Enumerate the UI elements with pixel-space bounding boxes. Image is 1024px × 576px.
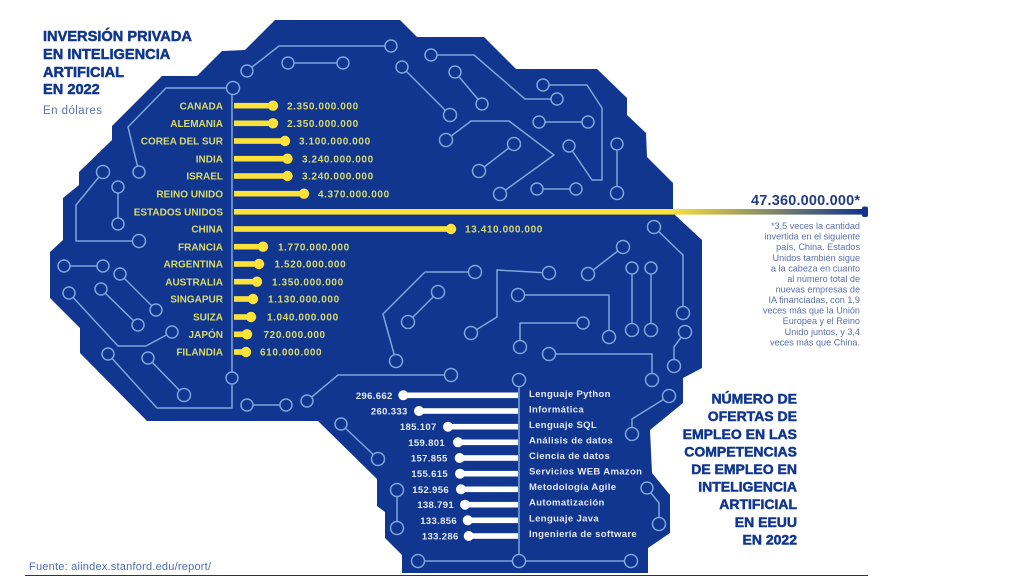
skill: Servicios WEB Amazon: Servicios WEB Amazon xyxy=(529,466,642,478)
country: Israel: ISRAEL xyxy=(186,172,223,183)
skill: Lenguaje SQL: 185.107 xyxy=(400,422,437,433)
country: Francia: FRANCIA xyxy=(178,242,223,253)
footnote on US investment: veces más que China. xyxy=(770,337,860,347)
skill: Automatización: Automatización xyxy=(529,498,605,508)
skill: Metodología Agile: 152.956 xyxy=(412,485,449,496)
skill: Informática xyxy=(371,404,584,418)
title: job postings: EN 2022 xyxy=(743,532,797,548)
country: Reino Unido: REINO UNIDO xyxy=(156,189,223,200)
country: Estados Unidos xyxy=(134,206,868,218)
footnote on US investment: invertida en el siguiente xyxy=(764,231,860,241)
title: job postings: OFERTAS DE xyxy=(708,408,797,424)
country: Estados Unidos: ESTADOS UNIDOS xyxy=(134,207,223,218)
country: Singapur: 1.130.000.000 xyxy=(268,295,340,306)
country: Alemania xyxy=(170,118,359,130)
country: Suiza: SUIZA xyxy=(193,313,223,324)
title: job postings: ARTIFICIAL xyxy=(719,496,797,512)
skill: Lenguaje Python xyxy=(356,389,611,402)
footnote on US investment: país, China. Estados xyxy=(776,242,860,252)
bar chart: job postings by skill xyxy=(356,389,642,542)
country: Alemania: 2.350.000.000 xyxy=(287,119,359,130)
title: job postings: EN EEUU xyxy=(735,514,797,530)
footnote on US investment: a la cabeza en cuanto xyxy=(771,263,860,273)
title: private investment xyxy=(43,27,192,98)
title: job postings: DE EMPLEO EN xyxy=(691,461,797,477)
title: job postings: INTELIGENCIA xyxy=(698,478,797,494)
footnote on US investment: Unidos también sigue xyxy=(773,253,860,263)
country: Japón xyxy=(189,328,326,341)
skill: Análisis de datos: Análisis de datos xyxy=(529,436,613,446)
skill: Lenguaje Java: 133.856 xyxy=(420,516,457,527)
circuit traces xyxy=(64,46,685,561)
circuit nodes xyxy=(58,40,692,568)
footnote on US investment: nuevas empresas de xyxy=(776,284,860,294)
country: Japón: JAPÓN xyxy=(189,328,223,341)
country: Israel xyxy=(186,171,374,183)
title: job postings xyxy=(683,390,797,548)
country: Australia: 1.350.000.000 xyxy=(272,277,344,288)
skill: Lenguaje SQL xyxy=(400,420,597,433)
country: Australia xyxy=(165,276,344,288)
skill: Ingeniería de software: Ingeniería de software xyxy=(529,529,637,540)
skill: Lenguaje Java: Lenguaje Java xyxy=(529,514,599,524)
skill: Lenguaje Python: Lenguaje Python xyxy=(529,389,611,400)
title: private investment: EN 2022 xyxy=(43,82,100,98)
skill: Informática: Informática xyxy=(529,404,584,416)
country: India xyxy=(196,154,374,165)
skill: Lenguaje SQL: Lenguaje SQL xyxy=(529,420,597,431)
country: Canada: CANADA xyxy=(180,101,223,112)
country: India: 3.240.000.000 xyxy=(302,154,374,165)
skill: Análisis de datos: 159.801 xyxy=(408,438,445,449)
footnote on US investment: IA financiadas, con 1,9 xyxy=(768,295,860,305)
country: Francia xyxy=(178,242,350,253)
skill: Automatización xyxy=(417,498,605,511)
skill: Automatización: 138.791 xyxy=(417,500,454,511)
title: private investment: INVERSIÓN PRIVADA xyxy=(43,27,192,45)
country: Argentina xyxy=(164,259,346,271)
country: Reino Unido xyxy=(156,188,390,200)
country: Filandia: FILANDIA xyxy=(176,348,223,359)
country: Argentina: ARGENTINA xyxy=(164,260,223,271)
country: Canada xyxy=(180,100,359,112)
skill: Ingeniería de software: 133.286 xyxy=(422,532,459,542)
country: Argentina: 1.520.000.000 xyxy=(274,260,346,271)
country: India: INDIA xyxy=(196,154,223,165)
skill: Ciencia de datos: 157.855 xyxy=(411,454,448,464)
country: Suiza xyxy=(193,312,339,324)
country: Singapur xyxy=(170,294,340,306)
country: Corea del Sur xyxy=(141,136,371,148)
skill: Informática: 260.333 xyxy=(371,406,408,418)
country: Canada: 2.350.000.000 xyxy=(287,101,359,112)
skill: Ciencia de datos: Ciencia de datos xyxy=(529,451,610,462)
country: Israel: 3.240.000.000 xyxy=(302,172,374,183)
title: private investment: EN INTELIGENCIA xyxy=(43,47,171,63)
title: private investment: ARTIFICIAL xyxy=(43,65,124,81)
country: Alemania: ALEMANIA xyxy=(170,119,223,130)
brain-shaped circuit panel xyxy=(50,20,702,573)
country: Corea del Sur: 3.100.000.000 xyxy=(299,137,371,148)
country: Singapur: SINGAPUR xyxy=(170,295,224,306)
country: Japón: 720.000.000 xyxy=(264,330,326,341)
title: job postings: EMPLEO EN LAS xyxy=(683,426,797,442)
country: Filandia: 610.000.000 xyxy=(260,348,322,359)
country: Corea del Sur: COREA DEL SUR xyxy=(141,137,224,148)
country: Australia: AUSTRALIA xyxy=(165,277,223,288)
country: Francia: 1.770.000.000 xyxy=(278,242,350,253)
country: Reino Unido: 4.370.000.000 xyxy=(318,189,390,200)
country: China: 13.410.000.000 xyxy=(465,225,543,236)
footnote on US investment xyxy=(763,221,860,347)
skill: Análisis de datos xyxy=(408,436,613,449)
title: job postings: COMPETENCIAS xyxy=(684,444,797,460)
country: Suiza: 1.040.000.000 xyxy=(267,313,339,324)
skill: Ingeniería de software xyxy=(422,529,637,542)
skill: Servicios WEB Amazon xyxy=(411,466,642,480)
skill: Servicios WEB Amazon: 155.615 xyxy=(411,469,448,480)
footnote on US investment: al número total de xyxy=(787,274,860,284)
footnote on US investment: Europea y el Reino xyxy=(783,316,860,326)
footnote on US investment: *3,5 veces la cantidad xyxy=(771,221,860,231)
country: Filandia xyxy=(176,347,322,359)
skill: Metodología Agile: Metodología Agile xyxy=(529,482,616,493)
footnote on US investment: Unido juntos, y 3,4 xyxy=(785,327,860,337)
skill: Lenguaje Python: 296.662 xyxy=(356,391,393,402)
bar chart: investment by country xyxy=(134,100,868,359)
country: China: CHINA xyxy=(191,225,223,236)
subtitle: currency: En dólares xyxy=(43,105,102,117)
skill: Ciencia de datos xyxy=(411,451,610,464)
title: job postings: NÚMERO DE xyxy=(711,390,797,406)
skill: Metodología Agile xyxy=(412,482,616,496)
source: Fuente: aiindex.stanford.edu/report/ xyxy=(29,561,212,573)
skill: Lenguaje Java xyxy=(420,514,599,527)
US total value: 47.360.000.000* xyxy=(751,193,860,209)
country: China xyxy=(191,224,543,236)
footnote on US investment: veces más que la Unión xyxy=(763,305,860,315)
